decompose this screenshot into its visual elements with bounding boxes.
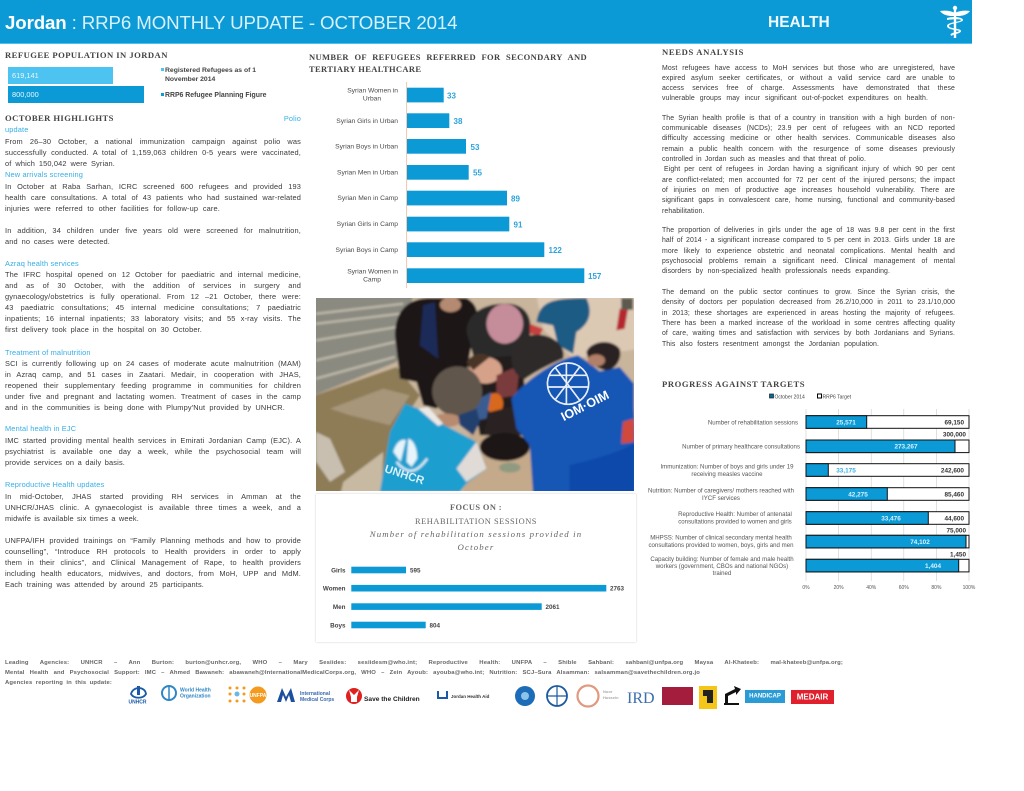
chart: progress against targets: Number of rehabilitation sessions <box>708 420 798 426</box>
chart: refugees referred for secondary and tertiary healthcare: 89 <box>511 194 520 204</box>
text block: needs analysis paragraph 4: The demand on the public sector continues to grow. Since the Syrian crisis, the <box>662 289 955 296</box>
chart: progress against targets: consultations provided to women, boys, girls and men <box>649 542 793 549</box>
bar chart: sessions by group: Boys <box>330 622 346 629</box>
chart: refugees referred for secondary and tertiary healthcare: 157 <box>588 272 602 281</box>
text block: new arrivals screening: injuries were referred to other facilities for follow-up care. <box>5 204 220 212</box>
chart: progress against targets: receiving measles vaccine <box>691 471 763 478</box>
text block: reproductive health updates: counselling”, “Introduce RH protocols to Health providers in order to apply <box>5 546 301 556</box>
chart: refugees referred for secondary and tertiary healthcare: Syrian Women in <box>347 88 398 94</box>
footer: lead agency contacts: Mental Health and Psychosocial Support: IMC – Ahmed Bawaneh: abawaneh@InternationalMedicalCorps.org, WHO – Zein Ayoub: ayouba@who.int; Nutrition: SCJ–Sura Alsamman: salsamman@savethechildren.org.jo <box>5 670 700 676</box>
text block: needs analysis paragraph 2: communicable diseases (NCDs); 23.9 per cent of refugees with an NCD reported <box>662 125 955 132</box>
chart: progress against targets: consultations provided to women and girls <box>678 518 792 526</box>
text block: reproductive health updates: them in their clinics”, and Clinical Management of Rape, to health providers <box>5 558 301 566</box>
chart: refugees referred for secondary and tertiary healthcare: Syrian Girls in Urban <box>336 118 398 125</box>
text block: needs analysis paragraph 1 <box>662 64 955 102</box>
legend: October 2014 <box>774 394 805 400</box>
logo: International Medical Corps: International <box>300 691 331 697</box>
text block: azraq health services: 43 paediatric consultations; 45 internal medicine consultations; 7 paediatric <box>5 303 301 312</box>
text block: mental health in EJC: psychiatrist is available one day a week, while the psychosocial team will <box>5 446 301 456</box>
legend: registered refugees <box>161 67 256 83</box>
chart: progress against targets: 25,571 <box>836 420 856 426</box>
heading: focus on: October <box>458 542 494 552</box>
logo: UNFPA: UNFPA <box>250 693 267 699</box>
text block: needs analysis paragraph 3 <box>662 226 955 275</box>
heading: focus on: FOCUS ON : <box>450 503 502 512</box>
text block: polio update <box>5 114 301 168</box>
text block: reproductive health updates: Each training was attended by around 25 participants. <box>5 580 204 588</box>
legend: planning figure: RRP6 Refugee Planning Figure <box>165 92 266 99</box>
chart: refugees referred for secondary and tertiary healthcare: Syrian Boys in Urban <box>335 144 398 150</box>
chart: refugees referred for secondary and tertiary healthcare: Urban <box>363 96 381 102</box>
text block: polio update: Polio <box>284 114 301 122</box>
heading: focus on: REHABILITATION SESSIONS <box>415 516 537 526</box>
text block: needs analysis paragraph 3: The proportion of deliveries in girls under the age of 18 was 9.8 per cent in the first <box>662 227 955 234</box>
text block: needs analysis paragraph 4: There has been a marked increase of the workload in some centres affecting quality <box>662 320 955 327</box>
footer: lead agency contacts: Leading Agencies: UNHCR – Ann Burton: burton@unhcr.org, WHO – Mary Sesiides: sesiidesm@who.int; Reproductive Health: UNFPA – Shible Sahbani: sahbani@unfpa.org Maysa Al-Khateeb: mal-khateeb@unfpa.org; <box>5 660 843 666</box>
heading: focus on: Number of rehabilitation sessions provided in <box>370 528 582 538</box>
text block: azraq health services <box>5 259 301 334</box>
logo: ring agency: Hussein <box>603 695 619 700</box>
text block: needs analysis paragraph 2: Eight per cent of refugees in Jordan having a significant injury of which 90 per cent <box>664 166 955 173</box>
logos: reporting agencies <box>128 684 834 709</box>
heading: needs analysis: NEEDS ANALYSIS <box>662 47 744 57</box>
chart: refugees referred for secondary and tertiary healthcare <box>335 82 602 288</box>
text block: treatment of malnutrition: and in the communities is being done with Plumpy'Nut provided by UNHCR. <box>5 402 285 412</box>
legend: registered refugees: November 2014 <box>165 76 215 83</box>
chart: progress against targets: IYCF services <box>702 495 740 502</box>
text block: needs analysis paragraph 2: are conflict-related; men accounted for 72 per cent of the injured persons; the impact <box>662 177 955 184</box>
text block: needs analysis paragraph 2: rehabilitation. <box>662 208 704 215</box>
chart: progress against targets: 42,275 <box>848 492 868 498</box>
text block: needs analysis paragraph 2: difficulty accessing medicine or other health services. Communicable diseases also <box>662 135 955 142</box>
logo: UNFPA <box>228 686 267 704</box>
title: Jordan : RRP6 MONTHLY UPDATE - OCTOBER 2014 <box>5 12 457 33</box>
legend: RRP6 Target <box>822 394 852 400</box>
text block: needs analysis paragraph 2: controlled in Jordan such as measles and that threat of polio. <box>662 156 866 163</box>
chart: progress against targets: 100% <box>963 585 976 591</box>
text block: new arrivals screening: New arrivals screening <box>5 170 83 178</box>
chart: progress against targets: 75,000 <box>946 528 966 534</box>
text block: needs analysis paragraph 4: in 2013; these shortages are experienced in areas hosting the majority of refugees. <box>662 310 955 317</box>
text block: needs analysis paragraph 2: remain a public health concern with the resurgence of some diseases previously <box>662 146 955 153</box>
text block: needs analysis paragraph 3: more likely to experience obstetric and neonatal complications. Mental health and <box>662 248 955 255</box>
heading: focus on <box>370 503 582 552</box>
photo: polio vaccination of a child <box>316 298 634 491</box>
chart: refugees referred for secondary and tertiary healthcare: Syrian Boys in Camp <box>336 247 398 254</box>
text block: azraq health services: The IFRC hospital opened on 12 October for paediatric and internal medicine, <box>5 270 301 279</box>
text block: needs analysis paragraph 4: of care, waiting times and satisfaction with services by both Jordanians and Syrians. <box>662 330 955 337</box>
chart: progress against targets: 0% <box>802 585 810 591</box>
text block: reproductive health updates: midwife is available six times a week. <box>5 514 139 522</box>
bar: registered refugees: 619,141 <box>12 71 39 80</box>
chart: progress against targets: 80% <box>931 585 942 591</box>
chart: refugees referred for secondary and tertiary healthcare: 33 <box>447 92 456 100</box>
text block: reproductive health updates <box>5 480 301 588</box>
text block: azraq health services: gynaecology/obstetrics is fully operational. From 12 –21 October, there were: <box>5 292 301 301</box>
chart: refugees referred for secondary and tertiary healthcare: 91 <box>514 220 523 230</box>
logo: IRC <box>699 686 717 709</box>
text block: new arrivals screening: In October at Raba Sarhan, ICRC screened 600 refugees and provided 193 <box>5 182 301 190</box>
photo: polio vaccination of a child: UNHCR <box>383 463 426 487</box>
chart: progress against targets: Number of primary healthcare consultations <box>682 444 800 450</box>
text block: treatment of malnutrition <box>5 348 301 412</box>
text block: reproductive health updates: including health educators, midwives, and doctors, from MoH, UPP and MdM. <box>5 568 301 578</box>
bar: planning figure: 800,000 <box>12 90 39 98</box>
text block: mental health in EJC: Mental health in EJC <box>5 424 76 433</box>
chart: progress against targets: MHPSS: Number of clinical secondary mental health <box>650 534 792 542</box>
panel: focus on rehabilitation sessions <box>316 494 636 642</box>
logo: UNHCR <box>128 686 147 706</box>
text block: polio update: successfully conducted. A total of 1,159,063 children 0-5 years were vaccinated, <box>5 148 301 156</box>
chart: progress against targets: Reproductive Health: Number of antenatal <box>678 511 792 518</box>
text block: new arrivals screening <box>5 170 301 246</box>
chart: refugees referred for secondary and tertiary healthcare: 38 <box>454 117 463 126</box>
bar chart: sessions by group: Men <box>333 604 346 611</box>
chart: progress against targets: 1,450 <box>950 552 966 558</box>
heading: october highlights: OCTOBER HIGHLIGHTS <box>5 113 114 123</box>
logo: Medair <box>791 690 834 704</box>
text block: needs analysis paragraph 2 <box>662 114 955 215</box>
logo: IRD: IRD <box>627 690 655 707</box>
heading: refugees referred <box>309 52 587 74</box>
chart: refugees referred for secondary and tertiary healthcare: Syrian Men in Camp <box>337 195 398 202</box>
chart: refugees referred for secondary and tertiary healthcare: 122 <box>548 246 562 255</box>
chart: progress against targets: 60% <box>899 585 909 591</box>
heading: refugee population: REFUGEE POPULATION IN JORDAN <box>5 50 168 60</box>
chart: progress against targets: 85,460 <box>944 492 964 498</box>
bar: planning figure <box>8 86 144 102</box>
chart: progress against targets: 33,476 <box>881 516 901 522</box>
chart: progress against targets: 44,600 <box>944 516 964 522</box>
text block: new arrivals screening: In addition, 34 children under five years old were screened for malnutrition, <box>5 226 301 234</box>
chart: progress against targets <box>648 394 976 591</box>
text block: treatment of malnutrition: reopened their supplementary feeding programme in communities for children <box>5 380 301 390</box>
logo: International Medical Corps: Medical Corps <box>300 697 334 703</box>
logo: black arrow emblem <box>724 686 741 705</box>
text block: azraq health services: inpatients; 16 internal inpatients; 33 laboratory visits; and 55 x-ray visits. The <box>5 314 301 323</box>
chart: progress against targets: 20% <box>834 585 844 591</box>
text block: azraq health services: Azraq health services <box>5 259 79 268</box>
chart: progress against targets: 273,267 <box>894 444 918 450</box>
text block: new arrivals screening: and no cases were detected. <box>5 236 110 246</box>
people at the back <box>536 298 590 353</box>
chart: progress against targets: 74,102 <box>910 539 930 546</box>
chart: refugees referred for secondary and tertiary healthcare: Syrian Women in <box>347 268 398 276</box>
text block: reproductive health updates: UNHCR/JHAS clinic. A gynaecologist is available three times a week, and a <box>5 502 301 512</box>
text block: mental health in EJC <box>5 424 301 466</box>
chart: progress against targets: 40% <box>866 585 877 591</box>
logo: Jordan Health Aid Society: Jordan Health Aid <box>451 694 490 699</box>
text block: reproductive health updates: UNFPA/IFH provided trainings on “Family Planning methods and how to provide <box>5 536 301 544</box>
text block: needs analysis paragraph 2: significant gaps in convalescent care, home nursing, functional and community-based <box>662 197 955 204</box>
logo: WHO: World Health <box>180 688 211 694</box>
chart: progress against targets: 242,600 <box>941 468 964 474</box>
text block: mental health in EJC: IMC started providing mental health services in Emirati Jordanian Camp (EJC). A <box>5 436 301 444</box>
IOM worker <box>511 355 640 495</box>
legend: registered refugees: Registered Refugees as of 1 <box>165 67 256 74</box>
text block: needs analysis paragraph 2: The Syrian health profile is that of a country in transition with a high burden of non- <box>662 115 955 122</box>
chart: refugees referred for secondary and tertiary healthcare: Camp <box>363 276 381 284</box>
text block: treatment of malnutrition: under five and pregnant and lactating women. Treatment of cases in the camp <box>5 392 301 400</box>
footer: lead agency contacts <box>5 660 843 686</box>
logo: ring agency <box>578 686 619 706</box>
chart: refugees referred for secondary and tertiary healthcare: Syrian Men in Urban <box>337 170 398 176</box>
logo: International Medical Corps <box>277 688 334 703</box>
logo: maroon agency <box>662 687 693 705</box>
text block: treatment of malnutrition: Treatment of malnutrition <box>5 348 91 356</box>
chart: refugees referred for secondary and tertiary healthcare: 53 <box>470 143 480 152</box>
chart: progress against targets: trained <box>713 570 731 577</box>
chart: refugee population bars <box>8 67 266 103</box>
chart: progress against targets: 69,150 <box>944 420 964 426</box>
text block: mental health in EJC: provide services on a daily basis. <box>5 458 125 466</box>
heading: progress against targets: PROGRESS AGAINST TARGETS <box>662 379 805 389</box>
text block: needs analysis paragraph 1: Most refugees have access to MoH services but those who are unregistered, have <box>662 64 955 72</box>
chart: progress against targets: Nutrition: Number of caregivers/ mothers reached with <box>648 488 794 494</box>
footer: lead agency contacts: Agencies reporting in this update: <box>5 680 112 686</box>
UNHCR worker <box>432 366 482 416</box>
bar chart: sessions by group: Women <box>323 586 346 593</box>
text block: needs analysis paragraph 4: density of doctors per population decreased from 26.2/10,000 in 2011 to 23.1/10,000 <box>662 299 955 306</box>
chart: progress against targets: 1,404 <box>925 563 941 570</box>
bar chart: sessions by group: 595 <box>410 568 421 574</box>
text block: needs analysis paragraph 3: psychosocial problems remain a significant need. Clinical management of mental <box>662 258 955 265</box>
chart: progress against targets: Immunization: Number of boys and girls under 19 <box>660 464 794 470</box>
text block: needs analysis paragraph 3: disorders by non-specialized health professionals needs expanding. <box>662 268 890 275</box>
chart: progress against targets: Capacity building: Number of female and male health <box>650 556 794 563</box>
child <box>469 357 502 383</box>
logo: IOM <box>547 686 567 706</box>
bar chart: sessions by group: 804 <box>430 622 441 629</box>
header banner <box>0 0 972 44</box>
sector label: HEALTH <box>768 14 830 31</box>
text block: needs analysis paragraph 1: vulnerable groups may incur significant out-of-pocket expenditures on health. <box>662 95 928 102</box>
bar: registered refugees <box>8 67 113 84</box>
text block: polio update: update <box>5 124 29 134</box>
text block: needs analysis paragraph 1: expired asylum seeker certificates, or without a valid service card are unable to <box>662 75 955 82</box>
icon: caduceus <box>940 6 970 38</box>
text block: needs analysis paragraph 2: of injuries on men of productive age increases household vulnerability. There are <box>662 187 955 194</box>
text block: treatment of malnutrition: SCI is currently following up on 24 cases of moderate acute malnutrition (MAM) <box>5 358 301 368</box>
text block: new arrivals screening: health care consultations. A total of 43 patients who had sustained war-related <box>5 192 301 202</box>
bar chart: sessions by group: 2763 <box>610 586 625 593</box>
logo: blue circle agency <box>515 686 535 706</box>
text block: needs analysis paragraph 4 <box>662 288 955 348</box>
text block: needs analysis paragraph 4: This also fosters resentment amongst the Jordanian population. <box>662 341 879 348</box>
heading: refugees referred: TERTIARY HEALTHCARE <box>309 64 421 74</box>
text block: reproductive health updates: Reproductive Health updates <box>5 480 104 489</box>
heading: refugees referred: NUMBER OF REFUGEES REFERRED FOR SECONDARY AND <box>309 52 587 62</box>
chart: progress against targets: 33,175 <box>836 468 856 474</box>
text block: polio update: From 26–30 October, a national immunization campaign against polio was <box>5 136 301 146</box>
text block: needs analysis paragraph 1: access services free of charge. Assessments have demonstrated that these <box>662 85 955 92</box>
logo: UNHCR: UNHCR <box>128 700 147 706</box>
bar chart: sessions by group: 2061 <box>546 604 560 611</box>
logo: Save the Children <box>346 688 420 704</box>
logo: Medair: MEDAIR <box>797 692 828 702</box>
text block: azraq health services: first delivery took place in the hospital on 30 October. <box>5 325 202 334</box>
logo: Handicap International <box>745 690 785 703</box>
logo: Save the Children: Save the Children <box>364 696 420 703</box>
logo: ring agency: Noor <box>603 689 613 694</box>
text block: treatment of malnutrition: in Azraq camp, and 51 cases in Zaatari. Medair, in cooperation with JHAS, <box>5 370 301 378</box>
legend <box>770 394 852 400</box>
text block: reproductive health updates: In mid-October, JHAS started providing RH services in Amman at the <box>5 492 301 500</box>
photo: polio vaccination of a child: IOM·OIM <box>559 388 611 424</box>
chart: refugees referred for secondary and tertiary healthcare: Syrian Girls in Camp <box>337 221 398 228</box>
logo: Handicap International: HANDICAP <box>749 694 781 700</box>
chart: progress against targets: workers (government, CBOs and national NGOs) <box>655 563 788 570</box>
logo: WHO: Organization <box>180 694 211 700</box>
logo: WHO <box>162 686 211 700</box>
chart: progress against targets: 300,000 <box>943 432 966 438</box>
text block: azraq health services: and as of 30 October, with the addition of services in surgery and <box>5 281 301 290</box>
logo: Jordan Health Aid Society <box>438 691 490 699</box>
chart: refugees referred for secondary and tertiary healthcare: 55 <box>473 168 482 178</box>
text block: needs analysis paragraph 3: half of 2014 - a significant increase compared to 5 per cent in 2013. Girls under 18 are <box>662 237 955 244</box>
bar chart: sessions by group <box>322 566 625 629</box>
bar chart: sessions by group: Girls <box>331 568 346 574</box>
text block: polio update: of which 150,042 were Syrian. <box>5 158 115 168</box>
